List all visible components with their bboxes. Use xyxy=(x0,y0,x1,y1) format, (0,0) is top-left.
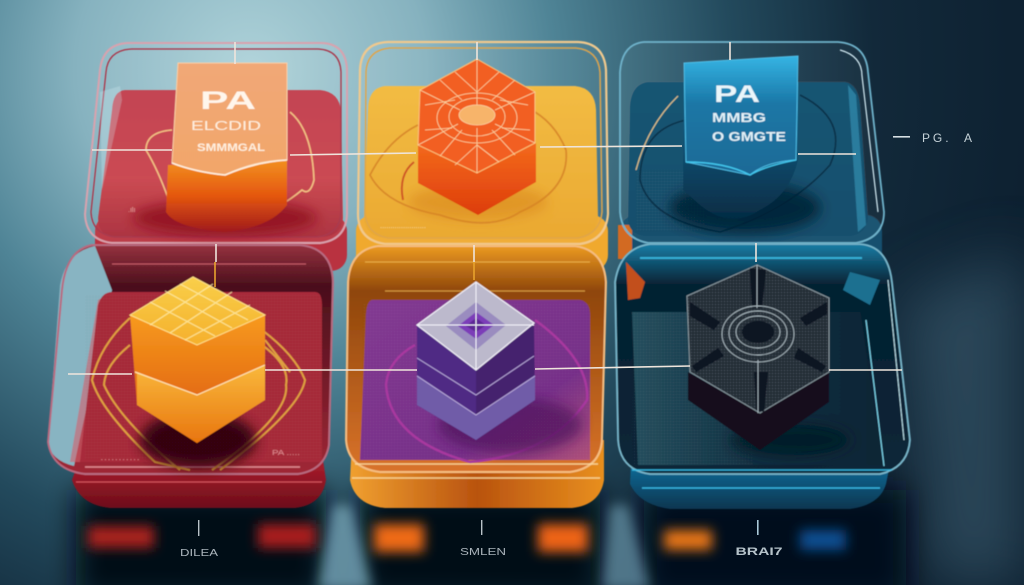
column label: right: BRAI7 xyxy=(736,546,782,558)
shadow under hexagon xyxy=(408,184,548,220)
icon: wire ring xyxy=(386,320,587,462)
column label: right xyxy=(736,520,782,558)
tag body xyxy=(683,56,798,219)
side label xyxy=(893,131,972,145)
panel: tray orange bottom xyxy=(346,246,606,508)
small tray text: ...................... xyxy=(380,224,426,230)
column label: left xyxy=(180,520,218,559)
panel: tray blue bottom xyxy=(615,244,910,509)
panel: tray blue top xyxy=(618,42,884,271)
icon: wire ring xyxy=(640,95,836,232)
connector threads xyxy=(68,42,902,374)
reflection glows xyxy=(88,524,846,552)
icon: wire loop xyxy=(146,112,314,228)
dark floor shadows below trays xyxy=(76,490,906,585)
shadow under tag xyxy=(669,182,821,234)
small tray text: ........... xyxy=(100,456,141,462)
tag lower body xyxy=(166,160,287,232)
column label: left: DILEA xyxy=(180,548,218,559)
panel: tray red bottom xyxy=(48,245,333,508)
tag title: PA xyxy=(200,87,256,115)
icon: tag highlight xyxy=(686,160,796,175)
icon: wire loops xyxy=(92,318,305,470)
column label: middle: SMLEN xyxy=(460,547,506,558)
side label: PG. A xyxy=(922,131,972,145)
orange thread ends xyxy=(215,262,474,287)
tag upper body xyxy=(172,63,287,175)
column label: middle xyxy=(460,520,506,558)
icon: tag highlight xyxy=(172,160,287,175)
shadow under cube xyxy=(140,412,256,468)
panel: tray red top xyxy=(85,43,347,271)
shadow under tag xyxy=(133,200,317,236)
cube xyxy=(417,282,535,440)
shadow under cube xyxy=(438,397,582,453)
tag line one: MMBG xyxy=(712,110,766,125)
hexagon block xyxy=(418,59,536,215)
tag title: PA xyxy=(714,81,760,108)
tag line two: O GMGTE xyxy=(712,129,786,144)
soft light at lower right xyxy=(900,250,1024,585)
small tray text: PA ..... xyxy=(272,450,300,457)
tag line two: SMMMGAL xyxy=(197,142,265,154)
tag line one: ELCDID xyxy=(191,118,261,133)
panel: tray yellow top xyxy=(356,42,608,271)
light streaks between trays xyxy=(318,505,650,585)
icon: wire ring xyxy=(370,112,566,223)
hexagon block xyxy=(687,265,850,458)
small tray text: .ılı xyxy=(128,207,135,214)
cube xyxy=(130,277,265,443)
